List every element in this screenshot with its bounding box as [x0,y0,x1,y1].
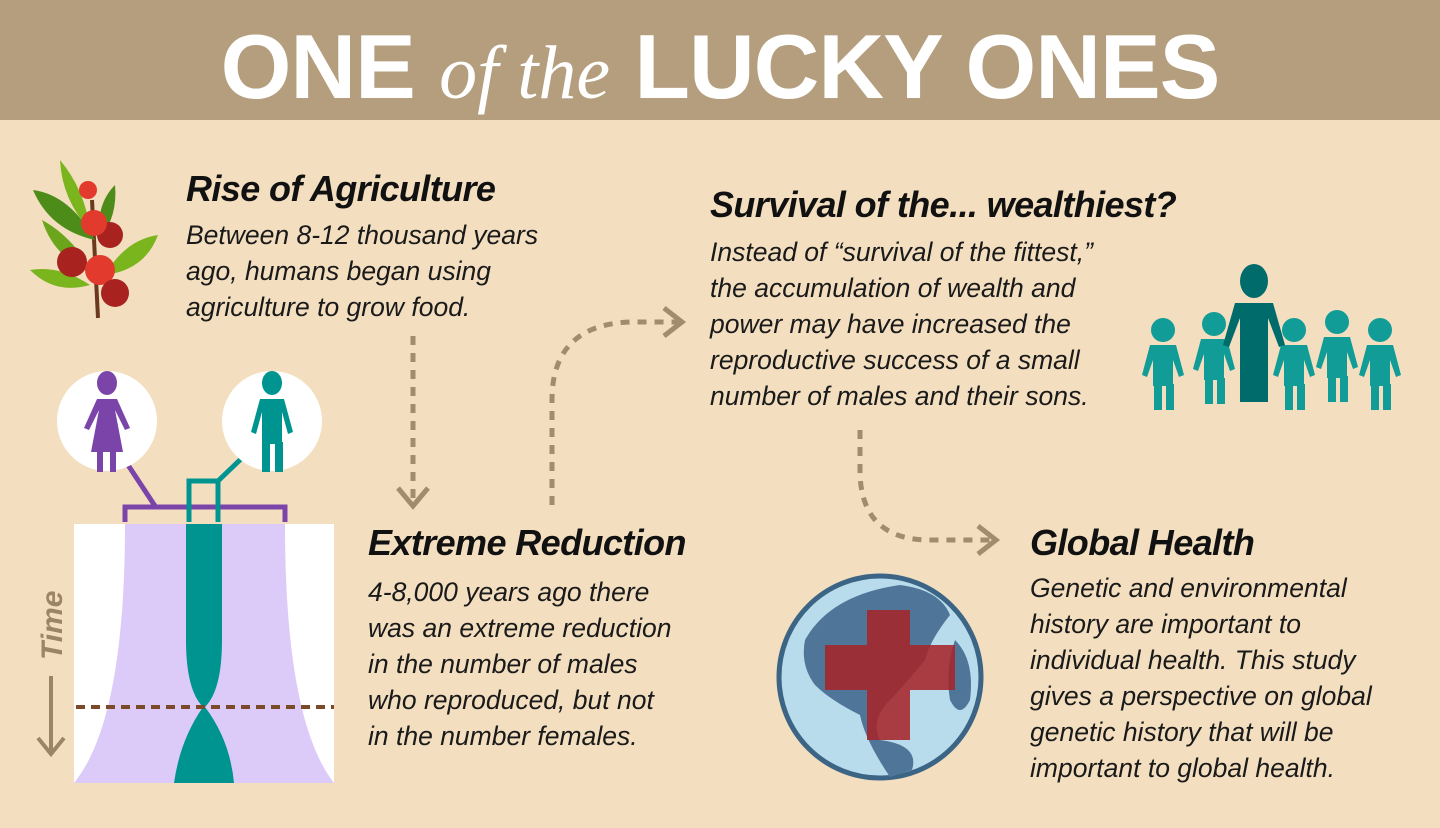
text: global health: individual health. This study [1030,645,1356,675]
arrow: reduction to survival [552,308,682,505]
icon: female [57,371,157,472]
text: rise of agriculture: agriculture to grow food. [186,292,470,322]
text: extreme reduction: in the number of males [368,649,638,679]
text: rise of agriculture [186,220,538,322]
text: survival: the accumulation of wealth and [710,273,1075,303]
text: global health [1030,573,1372,783]
heading: global health: Global Health [1030,522,1254,563]
text: extreme reduction: 4-8,000 years ago there [368,577,649,607]
text: survival: Instead of “survival of the fittest,” [710,237,1093,267]
text: extreme reduction [368,577,671,751]
bracket: female [125,465,285,522]
text: global health: gives a perspective on global [1030,681,1372,711]
chart: population over time [36,264,1401,783]
label: time axis: Time [36,591,69,660]
bracket: male [189,458,242,522]
header band [0,0,1440,120]
text: global health: Genetic and environmental [1030,573,1347,603]
text: global health: genetic history that will be [1030,717,1333,747]
arrow: survival to global health [860,430,996,554]
text: global health: important to global health. [1030,753,1335,783]
label: time axis [36,591,69,754]
text: extreme reduction: was an extreme reduction [368,613,671,643]
icon: male [222,371,322,472]
title: ONE of the LUCKY ONES [221,17,1219,118]
text: survival: number of males and their sons. [710,381,1089,411]
text: survival: reproductive success of a small [710,345,1080,375]
arrow: agriculture to reduction [398,336,428,506]
text: survival [709,237,1094,411]
text: survival: power may have increased the [710,309,1071,339]
text: rise of agriculture: ago, humans began using [186,256,491,286]
text: extreme reduction: in the number females. [368,721,638,751]
text: global health: history are important to [1030,609,1301,639]
heading: rise of agriculture: Rise of Agriculture [186,168,495,209]
icon: family [1142,264,1401,410]
text: rise of agriculture: Between 8-12 thousand years [186,220,538,250]
text: extreme reduction: who reproduced, but not [368,685,654,715]
icon: agriculture branch [30,160,158,318]
heading: extreme reduction: Extreme Reduction [368,522,686,563]
heading: survival: Survival of the... wealthiest? [710,184,1176,225]
icon: globe with cross [779,576,981,778]
